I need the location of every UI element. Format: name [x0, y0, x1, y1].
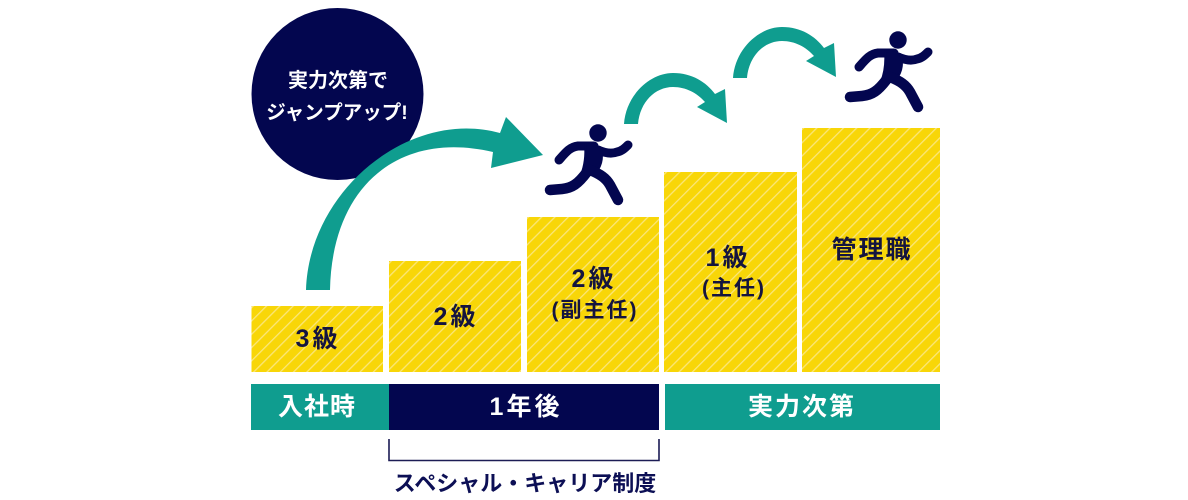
icon: runner lower	[550, 124, 628, 200]
label: 入社時	[251, 384, 389, 430]
large arrow	[306, 117, 543, 290]
step: 2級	[389, 261, 521, 372]
step: 3級: 3級	[296, 325, 340, 353]
step: 2級 副主任: (副主任)	[552, 299, 638, 322]
step: 管理職	[802, 128, 940, 372]
step: 3級	[252, 306, 383, 372]
bracket	[389, 439, 659, 460]
icon: runner upper	[850, 31, 928, 107]
label: 実力次第	[665, 384, 940, 430]
callout circle	[252, 8, 424, 180]
label: 入社時: 入社時	[278, 393, 356, 421]
step: 1級 主任: (主任)	[702, 277, 766, 300]
caption: スペシャル・キャリア制度	[394, 471, 656, 496]
step: 管理職: 管理職	[831, 236, 913, 264]
step: 2級 副主任: 2級	[572, 265, 616, 293]
callout circle: ジャンプアップ!	[266, 102, 408, 124]
label: 1年後: 1年後	[490, 393, 562, 421]
small arrow 1	[624, 73, 727, 124]
step: 2級: 2級	[434, 303, 478, 331]
small arrow 2	[733, 27, 836, 78]
label: 実力次第: 実力次第	[748, 393, 856, 421]
callout circle: 実力次第で	[288, 69, 388, 92]
step: 1級 主任: 1級	[706, 244, 750, 272]
step: 2級 副主任	[527, 217, 659, 372]
label: 1年後	[389, 384, 659, 430]
step: 1級 主任	[664, 172, 797, 372]
